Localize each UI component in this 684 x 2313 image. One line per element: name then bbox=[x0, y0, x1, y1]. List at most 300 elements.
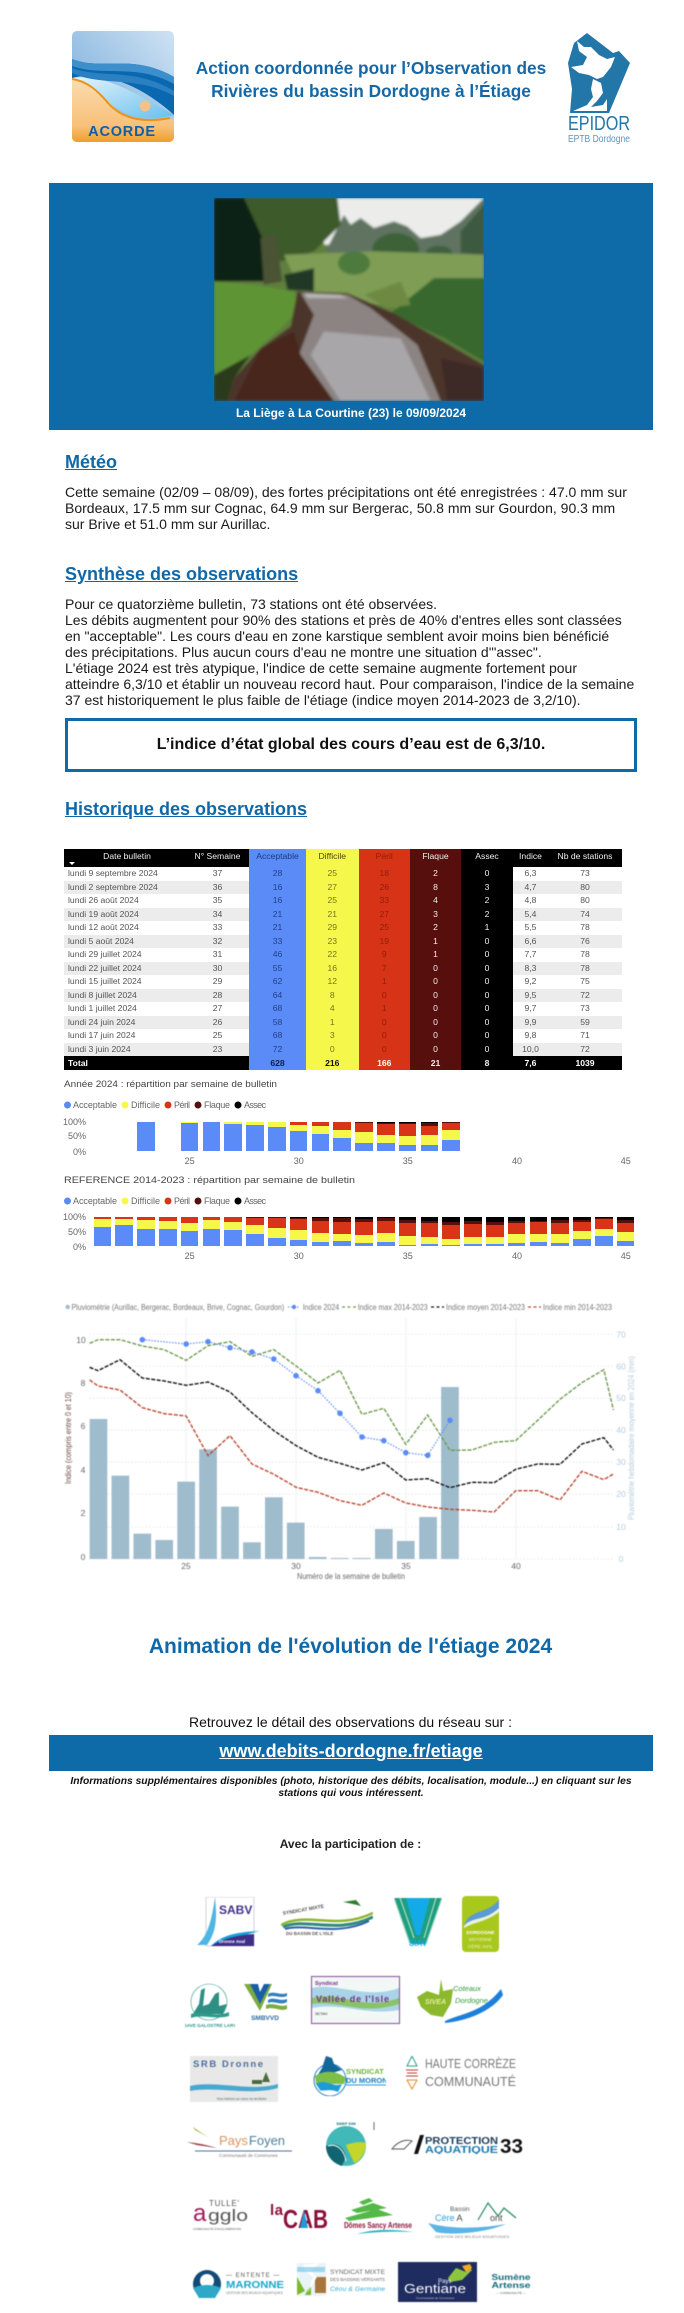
table: historique: 0 bbox=[485, 962, 489, 972]
text: informations bbox=[70, 1776, 632, 1798]
axes labels: 6 bbox=[81, 1421, 86, 1431]
logo: SIVEA Coteaux de Dordogne: SIVEA bbox=[425, 1999, 446, 2006]
table: historique: 4,7 bbox=[525, 882, 536, 892]
table: historique: 216 bbox=[325, 1058, 339, 1068]
chart: répartition 2024: Année 2024 : répartition par semaine de bulletin bbox=[64, 1079, 277, 1089]
table: historique: 9,7 bbox=[525, 1003, 536, 1013]
chart: répartition 2024: 25 bbox=[185, 1156, 195, 1166]
table: historique: 72 bbox=[580, 990, 590, 1000]
table: historique: N° Semaine bbox=[195, 851, 240, 861]
table: historique: 23 bbox=[327, 936, 337, 946]
chart: répartition 2024: 100% bbox=[63, 1117, 86, 1127]
logo: SMEP EIM: SMEP EIM bbox=[336, 2121, 356, 2126]
table: historique: 34 bbox=[213, 908, 222, 918]
table: historique: 3 bbox=[330, 1030, 335, 1040]
chart: indice et pluviométrie: 30 bbox=[616, 1457, 626, 1467]
logo: EPIDOR bbox=[568, 33, 630, 145]
table: historique: 73 bbox=[580, 868, 590, 878]
axes labels: 30 bbox=[291, 1561, 301, 1571]
chart: indice et pluviométrie: 0 bbox=[619, 1554, 624, 1564]
table: historique: Total bbox=[68, 1058, 88, 1068]
table: historique: 72 bbox=[580, 1044, 590, 1054]
table: historique: 0 bbox=[433, 1016, 438, 1026]
table: historique: 9,5 bbox=[525, 990, 536, 1000]
legend: Indice max 2014-2023 bbox=[358, 1303, 428, 1312]
table: historique: lundi 9 septembre 2024 bbox=[68, 868, 158, 878]
chart: répartition 2024: Flaque bbox=[204, 1100, 230, 1110]
chart: répartition 2024: Assec bbox=[244, 1100, 266, 1110]
table: historique: lundi 17 juin 2024 bbox=[68, 1030, 135, 1040]
logo: syndicat mixte Isle: DU BASSIN DE L'ISLE bbox=[286, 1931, 333, 1936]
logo: Pays Gentiane: Communauté de Communes bbox=[416, 2296, 455, 2300]
table: historique: 3 bbox=[485, 882, 489, 892]
table: historique: 0 bbox=[485, 1030, 489, 1040]
table: historique: 12 bbox=[327, 976, 337, 986]
text: informations: stations qui vous intéressent. bbox=[278, 1788, 424, 1798]
logo: Sumène Artense bbox=[491, 2273, 531, 2294]
text: retrouvez: Retrouvez le détail des observations du réseau sur : bbox=[189, 1714, 512, 1730]
table: historique: 0 bbox=[382, 1044, 387, 1054]
logo: Pays Foyen bbox=[187, 2126, 293, 2158]
table: historique: 80 bbox=[580, 895, 590, 905]
table: historique: 8 bbox=[433, 882, 438, 892]
text: synthèse: Les débits augmentent pour 90% des stations et près de 40% d'entres elles sont classées bbox=[65, 612, 622, 628]
logo: SIVEA Coteaux de Dordogne: Dordogne bbox=[455, 1996, 488, 2005]
axes labels: 35 bbox=[401, 1561, 411, 1571]
photo caption: La Liège à La Courtine (23) le 09/09/2024 bbox=[236, 406, 466, 420]
chart: répartition référence 2014-2023: Péril bbox=[174, 1196, 190, 1206]
table: historique: 33 bbox=[213, 922, 222, 932]
chart: répartition 2024: 45 bbox=[621, 1156, 631, 1166]
table: historique: 7,7 bbox=[525, 949, 536, 959]
text: météo: Bordeaux, 17.5 mm sur Cognac, 64.9 mm sur Bergerac, 50.8 mm sur Gourdon, 90.3 mm bbox=[65, 500, 615, 516]
chart: répartition référence 2014-2023: 45 bbox=[621, 1251, 631, 1261]
text: synthèse: 37 est historiquement le plus faible de l'étiage (indice moyen 2014-2023 de 3,2/10). bbox=[65, 692, 581, 708]
table: historique: 9,2 bbox=[525, 976, 536, 986]
table: historique: 36 bbox=[213, 882, 222, 892]
axes labels: 40 bbox=[511, 1561, 521, 1571]
table: historique: 32 bbox=[213, 936, 222, 946]
table: historique: 6,6 bbox=[525, 936, 536, 946]
logo: Haute Corrèze Communauté bbox=[405, 2055, 516, 2090]
table: historique: 59 bbox=[580, 1016, 590, 1026]
table: historique: 62 bbox=[273, 976, 282, 986]
heading: animation: Animation de l'évolution de l'étiage 2024 bbox=[149, 1635, 552, 1658]
chart: répartition référence 2014-2023: 50% bbox=[68, 1227, 86, 1237]
table: historique: 16 bbox=[273, 882, 282, 892]
logo: Protection Aquatique 33 bbox=[390, 2134, 523, 2155]
axes labels: 4 bbox=[81, 1465, 86, 1475]
table: historique: 9 bbox=[382, 949, 387, 959]
table: historique: 5,4 bbox=[525, 908, 536, 918]
logo: Syndicat du Moron: SYNDICAT bbox=[346, 2067, 384, 2076]
logo: Vallée de l'Isle: Syndicat bbox=[315, 1981, 338, 1987]
table: historique: 0 bbox=[433, 1003, 438, 1013]
chart: indice et pluviométrie: 10 bbox=[616, 1522, 626, 1532]
legend: Indice 2024 bbox=[303, 1303, 340, 1312]
logo: Céou et Germaine: DES BASSINS VERSANTS bbox=[330, 2277, 385, 2282]
logo: Dordogne moyenne: MOYENNE bbox=[469, 1937, 492, 1942]
table: historique: 0 bbox=[485, 936, 489, 946]
logo: Tulle agglo bbox=[192, 2199, 248, 2231]
chart: répartition 2024 bbox=[63, 1079, 631, 1166]
legend: Pluviométrie (Aurillac, Bergerac, Bordeaux, Brive, Cognac, Gourdon) bbox=[72, 1303, 284, 1312]
chart: indice et pluviométrie: 70 bbox=[616, 1330, 626, 1340]
table: historique: 18 bbox=[379, 868, 389, 878]
table: historique: 3 bbox=[433, 908, 438, 918]
chart: répartition 2024: Péril bbox=[174, 1100, 190, 1110]
axes labels: 10 bbox=[76, 1335, 86, 1345]
chart: répartition référence 2014-2023: 0% bbox=[73, 1242, 86, 1252]
logo: La CAB: la bbox=[270, 2202, 284, 2219]
text: informations: Informations supplémentaires disponibles (photo, historique des débits, localisation, module...) en cliquant sur les bbox=[70, 1776, 632, 1787]
table: historique: 27 bbox=[327, 882, 337, 892]
table: historique: 2 bbox=[433, 922, 438, 932]
table: historique: 64 bbox=[273, 990, 282, 1000]
logo: SIVEA Coteaux de Dordogne: Coteaux bbox=[453, 1984, 481, 1993]
chart: indice et pluviométrie: 60 bbox=[616, 1362, 626, 1372]
chart: répartition référence 2014-2023: 40 bbox=[512, 1251, 522, 1261]
heading: participation: Avec la participation de : bbox=[280, 1837, 421, 1851]
chart: répartition référence 2014-2023: 25 bbox=[185, 1251, 195, 1261]
chart: répartition référence 2014-2023: Difficile bbox=[131, 1196, 160, 1206]
callout: indice global: L’indice d’état global des cours d’eau est de 6,3/10. bbox=[157, 736, 545, 753]
text: synthèse: des précipitations. Plus aucun cours d'eau ne montre une situation d'"assec". bbox=[65, 644, 542, 660]
table: historique: 28 bbox=[213, 990, 222, 1000]
chart: répartition référence 2014-2023 bbox=[63, 1175, 634, 1261]
legend bbox=[66, 1303, 612, 1312]
logo: Céou et Germaine: Céou & Germaine bbox=[330, 2286, 385, 2293]
table: historique: lundi 26 août 2024 bbox=[68, 895, 139, 905]
table: historique: 0 bbox=[485, 949, 489, 959]
banner: lien: www.debits-dordogne.fr/etiage bbox=[219, 1741, 483, 1761]
table: historique: 166 bbox=[377, 1058, 391, 1068]
table: historique: 22 bbox=[327, 949, 337, 959]
table: historique: 1 bbox=[433, 949, 438, 959]
table: historique: 4,8 bbox=[525, 895, 536, 905]
axes labels: Numéro de la semaine de bulletin bbox=[297, 1571, 405, 1581]
chart: répartition référence 2014-2023: Assec bbox=[244, 1196, 266, 1206]
table: historique: 16 bbox=[273, 895, 282, 905]
logo: SIVEA Coteaux de Dordogne bbox=[416, 1979, 504, 2024]
table: historique: 78 bbox=[580, 949, 590, 959]
table: historique: 1 bbox=[433, 936, 438, 946]
heading: Historique: Historique des observations bbox=[65, 799, 307, 819]
table: historique: 628 bbox=[270, 1058, 285, 1068]
logo: Pays Foyen: PaysFoyen bbox=[219, 2133, 285, 2148]
table: historique: 0 bbox=[382, 1030, 387, 1040]
table: historique: 28 bbox=[273, 868, 282, 878]
table: historique: 0 bbox=[485, 990, 489, 1000]
chart: répartition 2024: Acceptable bbox=[73, 1100, 117, 1110]
logo: Vallée de l'Isle: SETAH bbox=[315, 2012, 328, 2016]
logo: SABV bbox=[196, 1896, 260, 1947]
logo: Tulle agglo: TULLE' bbox=[209, 2199, 239, 2208]
logo: ACORDE bbox=[72, 31, 174, 142]
table: historique: 0 bbox=[485, 1044, 489, 1054]
table: historique: 23 bbox=[213, 1044, 222, 1054]
axes labels: 8 bbox=[81, 1378, 86, 1388]
table: historique: 21 bbox=[273, 922, 282, 932]
table: historique: 75 bbox=[580, 976, 590, 986]
table: historique: 7,6 bbox=[525, 1058, 536, 1068]
table: historique: 27 bbox=[213, 1003, 222, 1013]
logo: Tulle agglo: a bbox=[193, 2200, 207, 2227]
table: historique: 68 bbox=[273, 1003, 282, 1013]
table: historique: 46 bbox=[273, 949, 282, 959]
table: historique: lundi 5 août 2024 bbox=[68, 936, 134, 946]
table: historique: 0 bbox=[382, 990, 387, 1000]
table: historique: 33 bbox=[273, 936, 282, 946]
axes labels bbox=[63, 1335, 521, 1581]
logo: Save Galostre Lary bbox=[184, 1983, 236, 2028]
text: synthèse: en "acceptable". Les cours d'eau en zone karstique semblent avoir moins bien bénéficié bbox=[65, 628, 609, 644]
table: historique: lundi 19 août 2024 bbox=[68, 908, 139, 918]
table: historique: Indice bbox=[519, 851, 542, 861]
chart: répartition 2024: 50% bbox=[68, 1131, 86, 1141]
text: météo: Cette semaine (02/09 – 08/09), des fortes précipitations ont été enregistrées : 47.0 mm sur bbox=[65, 484, 627, 500]
logo: SRB Dronne: SRB Dronne bbox=[193, 2059, 263, 2070]
logo: Haute Corrèze Communauté: COMMUNAUTÉ bbox=[425, 2074, 516, 2089]
table: historique: 25 bbox=[327, 868, 337, 878]
table: historique: lundi 12 août 2024 bbox=[68, 922, 139, 932]
table: historique: 27 bbox=[379, 908, 389, 918]
logo: ACORDE: ACORDE bbox=[88, 124, 156, 140]
logo: Dômes Sancy Artense bbox=[344, 2198, 412, 2235]
chart: indice et pluviométrie: Pluviométrie hebdomadaire moyenne en 2024 (mm) bbox=[626, 1356, 636, 1520]
table: historique: 55 bbox=[273, 962, 282, 972]
chart: répartition 2024: 30 bbox=[294, 1156, 304, 1166]
heading: Synthèse: Synthèse des observations bbox=[65, 564, 298, 584]
table: historique: lundi 8 juillet 2024 bbox=[68, 990, 137, 1000]
logo: Sumène Artense: Sumène bbox=[492, 2273, 531, 2282]
logo: Entente Maronne: — ENTENTE — bbox=[226, 2273, 280, 2279]
table: historique: Flaque bbox=[422, 851, 449, 861]
table: historique: 0 bbox=[485, 868, 489, 878]
table: historique: lundi 22 juillet 2024 bbox=[68, 962, 142, 972]
title: Action coordonnée pour l’Observation des bbox=[196, 58, 546, 78]
photo: La Liège à La Courtine bbox=[214, 198, 484, 401]
logo: SRB Dronne: Nos rivières au cœur du territoire bbox=[217, 2097, 267, 2101]
logo: SRB Dronne bbox=[189, 2056, 279, 2102]
logo: Sumène Artense: Artense bbox=[492, 2281, 531, 2290]
logo: Vallée de l'Isle: Vallée de l'Isle bbox=[316, 1994, 389, 2004]
logo: Pays Gentiane: Pays bbox=[438, 2279, 451, 2285]
table: historique: 16 bbox=[327, 962, 337, 972]
chart: répartition référence 2014-2023: REFERENCE 2014-2023 : répartition par semaine de bulletin bbox=[64, 1175, 355, 1185]
chart: répartition 2024: 35 bbox=[403, 1156, 413, 1166]
table: historique: 9,8 bbox=[525, 1030, 536, 1040]
logo: Dordogne moyenne bbox=[461, 1895, 500, 1953]
table: historique: 19 bbox=[379, 936, 389, 946]
table: historique: 0 bbox=[485, 1016, 489, 1026]
table: historique: 9,9 bbox=[525, 1016, 536, 1026]
table: historique: 29 bbox=[213, 976, 222, 986]
logo: Dordogne moyenne: CÈRE AVAL bbox=[468, 1943, 493, 1949]
heading: Météo: Météo bbox=[65, 452, 117, 472]
table: historique: 6,3 bbox=[525, 868, 536, 878]
logo: SABV: SABV bbox=[219, 1903, 252, 1917]
logo: Pays Foyen: Communauté de Communes bbox=[219, 2153, 278, 2158]
logo: Cère Amont: Bassin bbox=[450, 2206, 470, 2213]
table: historique: 26 bbox=[213, 1016, 222, 1026]
table: historique: 80 bbox=[580, 882, 590, 892]
table: historique: 2 bbox=[485, 908, 489, 918]
chart: répartition référence 2014-2023: Flaque bbox=[204, 1196, 230, 1206]
text: synthèse: atteindre 6,3/10 et établir un nouveau record haut. Pour comparaison, l'indice de la semaine bbox=[65, 676, 634, 692]
table: historique: 0 bbox=[433, 1030, 438, 1040]
table: historique: 72 bbox=[273, 1044, 282, 1054]
table: historique: 0 bbox=[433, 1044, 438, 1054]
table: historique: 78 bbox=[580, 922, 590, 932]
logo: Pays Gentiane: Gentiane bbox=[404, 2281, 466, 2296]
logo: Entente Maronne: MARONNE bbox=[226, 2280, 284, 2291]
chart: répartition 2024: 40 bbox=[512, 1156, 522, 1166]
table: historique: 8,3 bbox=[525, 962, 536, 972]
table: historique: 0 bbox=[382, 1016, 387, 1026]
table: historique: 8 bbox=[330, 990, 335, 1000]
text: météo bbox=[65, 484, 627, 532]
table: historique: 1 bbox=[330, 1016, 335, 1026]
table: historique: 21 bbox=[273, 908, 282, 918]
logo: SIAV bbox=[394, 1897, 442, 1947]
chart: indice et pluviométrie: 40 bbox=[616, 1425, 626, 1435]
table: historique: 25 bbox=[213, 1030, 222, 1040]
logo: Tulle agglo: gglo bbox=[208, 2206, 248, 2225]
table: historique: 21 bbox=[327, 908, 337, 918]
chart: répartition référence 2014-2023: 30 bbox=[294, 1251, 304, 1261]
table: historique: 37 bbox=[213, 868, 222, 878]
axes labels: 25 bbox=[181, 1561, 191, 1571]
logo: Pays Gentiane bbox=[397, 2261, 478, 2303]
logo: syndicat mixte Isle bbox=[280, 1899, 374, 1936]
table: historique: 29 bbox=[327, 922, 337, 932]
table: historique: lundi 15 juillet 2024 bbox=[68, 976, 142, 986]
panel: photo banner bbox=[49, 183, 653, 430]
logo: Syndicat du Moron bbox=[312, 2055, 387, 2097]
table: historique: 10,0 bbox=[522, 1044, 539, 1054]
table: historique: 8 bbox=[485, 1058, 489, 1068]
table: historique: lundi 24 juin 2024 bbox=[68, 1016, 135, 1026]
table: historique: 25 bbox=[327, 895, 337, 905]
table: historique: 1039 bbox=[575, 1058, 595, 1068]
logo: Dordogne moyenne: DORDOGNE bbox=[466, 1930, 495, 1936]
table: historique: 1 bbox=[382, 976, 387, 986]
legend: Indice min 2014-2023 bbox=[543, 1303, 612, 1312]
table: historique: 1 bbox=[485, 922, 489, 932]
table: historique: Nb de stations bbox=[558, 851, 612, 861]
chart: répartition référence 2014-2023: 35 bbox=[403, 1251, 413, 1261]
axes labels: 2 bbox=[81, 1508, 86, 1518]
text: synthèse bbox=[65, 596, 634, 708]
chart: indice et pluviométrie: 50 bbox=[616, 1393, 626, 1403]
table: historique: lundi 1 juillet 2024 bbox=[68, 1003, 137, 1013]
logo: Cère Amont bbox=[428, 2202, 517, 2238]
table: historique: 2 bbox=[433, 868, 438, 878]
table: historique: Assec bbox=[475, 851, 499, 861]
table: historique: 7 bbox=[382, 962, 387, 972]
bars: pluviométrie bbox=[90, 1387, 459, 1559]
table: historique: 0 bbox=[433, 976, 438, 986]
table: historique: 0 bbox=[433, 990, 438, 1000]
table: historique: 68 bbox=[273, 1030, 282, 1040]
logo: Cère Amont: ont bbox=[490, 2213, 503, 2223]
table: historique: 30 bbox=[213, 962, 222, 972]
table: historique: 71 bbox=[580, 1030, 590, 1040]
table: historique: 26 bbox=[379, 882, 389, 892]
logo: Cère Amont: Cère A bbox=[435, 2213, 463, 2223]
table: historique: 0 bbox=[330, 1044, 335, 1054]
logo: SABV: Dronne Aval bbox=[219, 1939, 245, 1944]
table: historique: Date bulletin bbox=[103, 851, 151, 861]
text: météo: sur Brive et 51.0 mm sur Aurillac. bbox=[65, 516, 270, 532]
logo: Entente Maronne: GESTION DES MILIEUX AQUATIQUES bbox=[226, 2291, 283, 2295]
chart: répartition référence 2014-2023: 100% bbox=[63, 1212, 86, 1222]
logo: Tulle agglo: COMMUNAUTÉ D'AGGLOMÉRATION bbox=[193, 2226, 241, 2231]
logo: Entente Maronne bbox=[192, 2269, 284, 2299]
chart: répartition 2024: Difficile bbox=[131, 1100, 160, 1110]
table: historique: Acceptable bbox=[256, 851, 299, 861]
text: synthèse: Pour ce quatorzième bulletin, 73 stations ont été observées. bbox=[65, 596, 437, 612]
axes labels: 0 bbox=[81, 1552, 86, 1562]
table: historique: 4 bbox=[330, 1003, 335, 1013]
table: historique: Difficile bbox=[318, 851, 346, 861]
text: synthèse: L'étiage 2024 est très atypique, l'indice de cette semaine augmente fortement pour bbox=[65, 660, 577, 676]
table: historique: Péril bbox=[376, 851, 393, 861]
chart: répartition référence 2014-2023: Acceptable bbox=[73, 1196, 117, 1206]
callout: indice global bbox=[65, 718, 637, 772]
table: historique: 0 bbox=[485, 1003, 489, 1013]
table: historique: lundi 2 septembre 2024 bbox=[68, 882, 158, 892]
table: historique: 35 bbox=[213, 895, 222, 905]
title: Rivières du bassin Dordogne à l’Étiage bbox=[211, 81, 531, 101]
table: historique: 1 bbox=[382, 1003, 387, 1013]
axes labels: Indice (compris entre 0 et 10) bbox=[63, 1392, 73, 1484]
table: historique: 74 bbox=[580, 908, 590, 918]
logo: Céou et Germaine bbox=[296, 2263, 386, 2296]
table: historique: 2 bbox=[485, 895, 489, 905]
table: historique: lundi 29 juillet 2024 bbox=[68, 949, 142, 959]
logo: SMEP EIM bbox=[325, 2121, 376, 2167]
logo: Vallée de l'Isle bbox=[310, 1975, 401, 2025]
table: historique: 33 bbox=[379, 895, 389, 905]
logo: syndicat mixte Isle: SYNDICAT MIXTE bbox=[282, 1904, 325, 1917]
banner: lien bbox=[49, 1735, 653, 1771]
chart: indice et pluviométrie bbox=[63, 1303, 636, 1581]
table: historique: 31 bbox=[213, 949, 222, 959]
table: historique: 58 bbox=[273, 1016, 282, 1026]
chart: indice et pluviométrie: 20 bbox=[616, 1489, 626, 1499]
table: historique: 5,5 bbox=[525, 922, 536, 932]
lines: indices bbox=[90, 1340, 613, 1512]
table: historique: 21 bbox=[431, 1058, 440, 1068]
table: historique bbox=[64, 849, 622, 1070]
logo: SMBVVD bbox=[244, 1983, 288, 2021]
table: historique: 73 bbox=[580, 1003, 590, 1013]
chart: répartition 2024: 0% bbox=[73, 1147, 86, 1157]
table: historique: 4 bbox=[433, 895, 438, 905]
table: historique: 76 bbox=[580, 936, 590, 946]
table: historique: 0 bbox=[433, 962, 438, 972]
logo: Protection Aquatique 33: PROTECTION bbox=[425, 2136, 498, 2147]
table: historique: 0 bbox=[485, 976, 489, 986]
table: historique: lundi 3 juin 2024 bbox=[68, 1044, 131, 1054]
legend: Indice moyen 2014-2023 bbox=[446, 1303, 525, 1312]
logo: Céou et Germaine: SYNDICAT MIXTE bbox=[330, 2269, 385, 2276]
table: historique: 78 bbox=[580, 962, 590, 972]
points: indice 2024 bbox=[140, 1337, 453, 1458]
title bbox=[196, 58, 546, 101]
